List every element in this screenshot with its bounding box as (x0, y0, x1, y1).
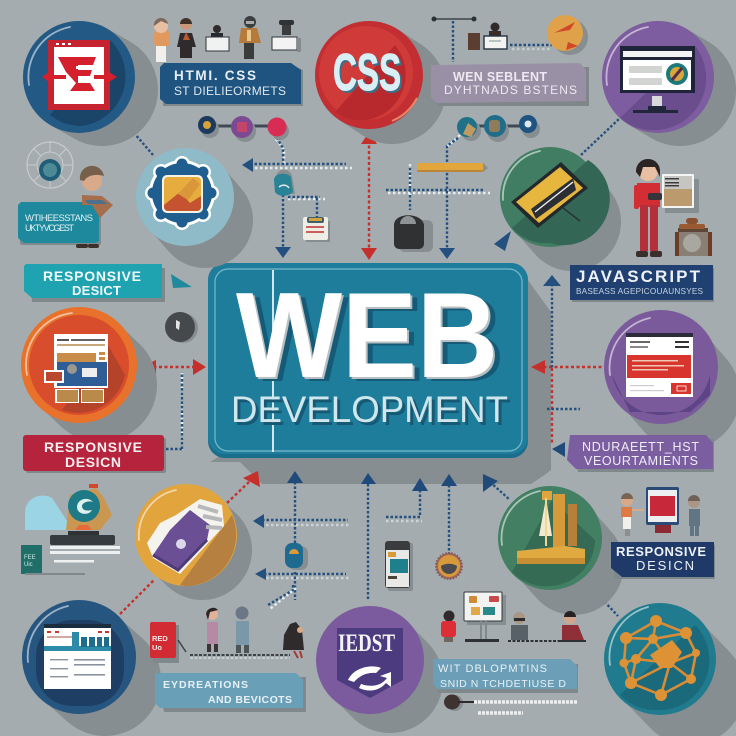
figures: bottom left team: Uo (152, 643, 162, 652)
panel: webpage circle purple (604, 310, 718, 424)
label: web selent: WEN SEBLENT (453, 70, 547, 84)
label: responsive teal (24, 264, 165, 302)
icon group: cloud and device (21, 486, 120, 575)
connectors and arrows (120, 16, 620, 616)
icon: id card (303, 217, 330, 242)
icon: antique clock (675, 218, 712, 256)
label: responsive red: RESPONSIVE (44, 439, 142, 455)
icon: sun badge (436, 553, 462, 579)
label: html css development (160, 63, 303, 106)
heading: web: WEB (236, 267, 498, 403)
label: wit deployments: WIT DBLOPMTINS (438, 663, 547, 675)
icon: blue bag (285, 543, 308, 570)
heading: css: CSS (333, 44, 401, 102)
panel: document circle blue (22, 600, 136, 714)
icon: teal bag (274, 170, 295, 196)
panel: monument circle green (498, 486, 602, 590)
label: responsive navy: RESPONSIVE (616, 544, 706, 559)
label: eydreations: AND BEVICOTS (208, 694, 292, 706)
figures: bottom left team: RED (152, 634, 168, 643)
label: teal small: WTIHEESSTANS (25, 213, 93, 224)
central panel shadow (210, 272, 551, 484)
icon: black bag (394, 215, 433, 252)
panel: webpage circle orange (21, 307, 137, 423)
heading: web: WEB (238, 269, 500, 405)
panel: app icon circle (136, 148, 234, 246)
label: javascript: BASEASS AGEPICOUAUNSYES (576, 287, 704, 296)
icon: pencil bar (417, 163, 488, 172)
label: eydreations: EYDREATIONS (163, 679, 248, 691)
label: responsive teal: DESICT (72, 283, 121, 298)
label: html css development: ST DIELIEORMETS (174, 84, 286, 98)
figure: person in red with card (634, 159, 699, 257)
figure: person with target (27, 142, 113, 248)
heading: web: WEB (243, 271, 505, 407)
label: nduraeett: NDURAEETT_HST (582, 440, 699, 454)
icon: orange pie (547, 15, 588, 55)
figure: top right laptop user (468, 22, 507, 50)
panel: monitor circle (602, 21, 714, 133)
heading: css (333, 44, 403, 104)
label: wit deployments: SNID N TCHDETIUSE D (440, 678, 566, 690)
label: eydreations (155, 673, 306, 712)
central panel: web development (208, 263, 528, 458)
figures: top left team (154, 16, 301, 62)
panel: css circle (315, 21, 423, 129)
icon group: cloud and device: FEE (24, 555, 36, 561)
panel: network circle teal (604, 603, 716, 715)
label: javascript (570, 265, 714, 302)
label: teal small: UKTYVCGEST (25, 223, 74, 233)
icon: swirl arrow (348, 666, 391, 691)
label: web selent: DYHTNADS BSTENS (444, 83, 577, 97)
panel: test circle purple (316, 606, 424, 714)
icon: dark disc (165, 312, 198, 343)
chain: top left dots (198, 116, 289, 142)
panel: html icon circle (23, 21, 135, 133)
label: teal small (18, 202, 101, 245)
label: responsive navy: DESICN (636, 558, 694, 573)
subheading: development: DEVELOPMENT (234, 392, 511, 433)
icon: phone (385, 541, 413, 591)
heading: css: CSS (335, 46, 403, 104)
label: responsive teal: RESPONSIVE (43, 268, 141, 284)
label: html css development: HTMI. CSS (174, 68, 256, 83)
subheading: development: DEVELOPMENT (231, 389, 508, 430)
label: nduraeett (567, 435, 714, 472)
panel: glove circle yellow (135, 484, 237, 586)
chain: top right dots (457, 115, 540, 142)
label: javascript: JAVASCRIPT (576, 267, 701, 286)
label: responsive navy (611, 542, 715, 579)
heading: iedst: IEDST (338, 630, 395, 657)
panel: card circle (500, 147, 610, 247)
figures: bottom right team (441, 592, 586, 642)
figures: responsive design team (621, 487, 700, 536)
icon: knob with zigzag (444, 694, 578, 713)
icon group: cloud and device: Uic (24, 562, 33, 568)
label: wit deployments (433, 659, 578, 693)
label: responsive red: DESICN (65, 454, 121, 470)
label: nduraeett: VEOURTAMIENTS (584, 454, 698, 468)
label: web selent (431, 63, 589, 106)
figures: bottom left team (150, 606, 304, 663)
label: responsive red (23, 435, 166, 473)
